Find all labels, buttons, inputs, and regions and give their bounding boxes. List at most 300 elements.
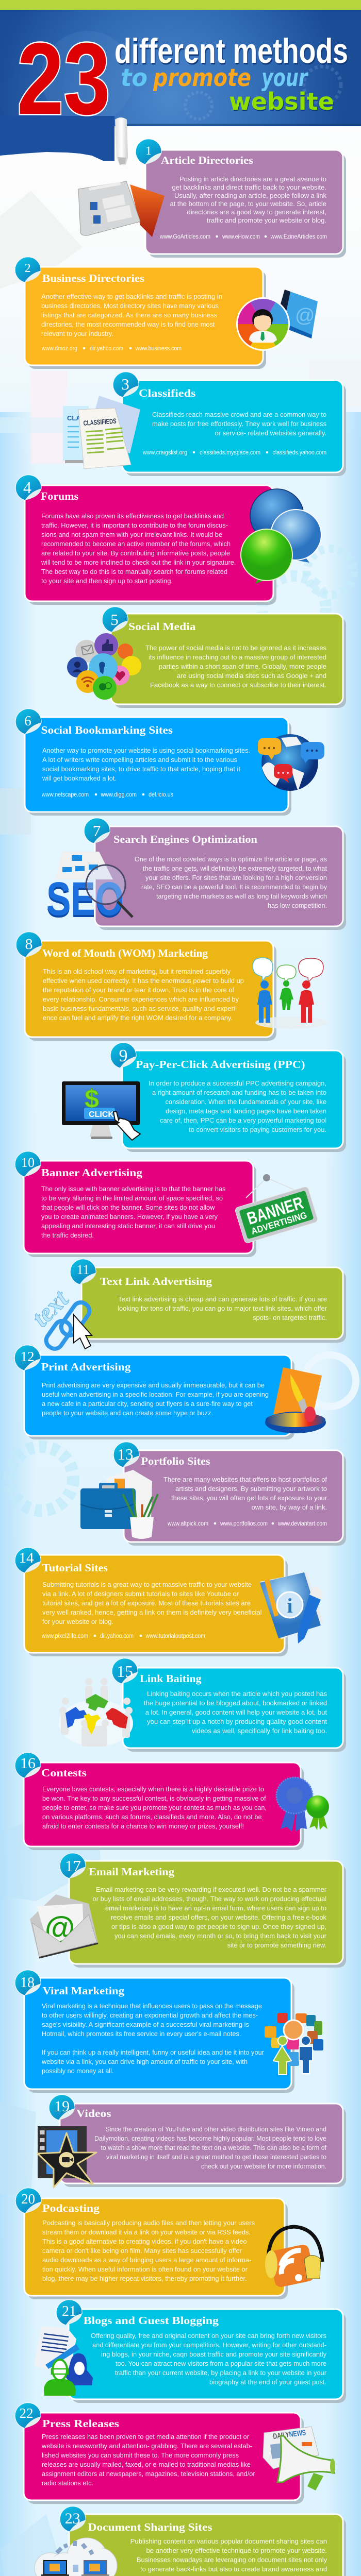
body text: The only issue with banner advertising is to that the banner has xyxy=(41,1185,226,1193)
heading: Social Media xyxy=(128,620,196,633)
number badge 17: 17 xyxy=(65,1857,81,1875)
body text: that people will click on the banner. Some sites do not allow xyxy=(41,1204,215,1211)
body text xyxy=(149,1079,326,1133)
body text xyxy=(130,2537,327,2576)
body text xyxy=(91,2332,327,2386)
body text: a lot. In general, good content will help your website a lot, but xyxy=(145,1708,327,1716)
panel: Link Baiting xyxy=(59,1658,346,1752)
heading: Word of Mouth (WOM) Marketing xyxy=(42,947,208,959)
example links xyxy=(167,1521,327,1527)
body text: assignment editors at newspapers, magazines, television stations, and/or xyxy=(42,2470,255,2478)
body text xyxy=(94,2125,326,2170)
panel: Banner Advertising xyxy=(15,1151,318,1257)
icon: SEO magnifier: SEO xyxy=(46,873,124,925)
body text: artists and designers. By submitting your artwork to xyxy=(175,1485,327,1493)
icon: people and app tiles xyxy=(265,2013,323,2075)
icon: document and bloggers xyxy=(34,2326,93,2396)
heading: Email Marketing xyxy=(89,1866,175,1878)
example links: www.netscape.com xyxy=(41,792,89,798)
heading: Videos xyxy=(76,2107,111,2120)
title line: to promote your: your xyxy=(261,64,308,92)
panel: Tutorial Sites xyxy=(15,1548,323,1656)
icon: RSS with headphones xyxy=(265,2227,322,2288)
heading: Business Directories xyxy=(42,272,144,284)
body text: these sites, you will often get lots of exposure to your xyxy=(171,1494,327,1502)
body text: are using social media sites such as Google + and xyxy=(177,672,326,680)
number badge 14: 14 xyxy=(19,1550,34,1566)
body text: This is a good alternative to creating videos, if you don't have a video xyxy=(42,2238,247,2245)
panel: Social Media xyxy=(67,607,346,708)
body text: Since the creation of YouTube and other video distribution sites like Vimeo and xyxy=(105,2125,326,2133)
body text: stream them or download it via a link on your website or via RSS feeds. xyxy=(42,2228,251,2236)
body text: ing blogs, in your niche, caqn boast traffic and promote your site significantly xyxy=(101,2350,326,2358)
icon: globe with chat bubbles xyxy=(258,734,324,791)
body text: possibly no money at all. xyxy=(42,2067,113,2075)
number badge 5 xyxy=(102,607,128,632)
number badge 10: 10 xyxy=(21,1155,35,1170)
panel: Contests xyxy=(15,1753,329,1850)
body text: the reputation of your brand or tear it down. Trust is in the core of xyxy=(43,986,234,994)
body text: Email marketing can be very rewarding if executed well. Do not be a spammer xyxy=(96,1886,327,1893)
example links: www.portfolios.com xyxy=(220,1521,268,1527)
body text xyxy=(144,1690,327,1735)
body text: Everyone loves contests, especially when there is a highly desirable prize to xyxy=(42,1785,264,1793)
heading: Portfolio Sites xyxy=(141,1455,210,1467)
body text: to generate back-links but also to create brand awareness and xyxy=(140,2565,327,2573)
panel: Podcasting xyxy=(15,2188,322,2299)
icon: speech bubbles xyxy=(241,489,321,584)
number badge 20: 20 xyxy=(21,2191,35,2207)
icon: paint brush and palette xyxy=(265,1367,326,1433)
body text: you to create animated banners. However, if you have a very xyxy=(41,1213,218,1221)
heading: Press Releases xyxy=(42,2417,119,2430)
number badge 19 xyxy=(49,2095,75,2120)
icon: classified papers: CLASSIFIEDS xyxy=(83,417,117,427)
body text: appealing and interesting static banner, it can still drive you xyxy=(41,1222,215,1230)
body text: Hotmail, which promotes its free service in every user's e-mail notes. xyxy=(42,2030,241,2038)
icon: newspaper and megaphone xyxy=(263,2427,335,2490)
number badge 21: 21 xyxy=(62,2303,76,2319)
body text: relevant to your industry. xyxy=(41,330,113,337)
body text: check out your website for more information. xyxy=(201,2162,326,2170)
body text: you can send emails, every month or so, to bring them back to visit your xyxy=(114,1932,327,1940)
body text: receive emails and special offers, on your website. Offering a free e-book xyxy=(111,1913,326,1921)
icon: newspaper and megaphone: DAILYNEWS xyxy=(272,2428,306,2441)
number badge 21 xyxy=(56,2300,82,2325)
panel: Document Sharing Sites xyxy=(35,2506,346,2576)
example links: dir.yahoo.com xyxy=(90,346,123,352)
number badge 16: 16 xyxy=(20,1755,36,1772)
body text xyxy=(163,1476,327,1511)
example links: www.GoArticles.com xyxy=(159,234,210,240)
title line: to promote your xyxy=(121,64,308,92)
body text: Linking baiting occurs when the article which you posted has xyxy=(147,1690,327,1698)
icon: info book and pencil: i xyxy=(287,1594,293,1617)
body text: A lot of writers write compelling articles and submit it to the various xyxy=(42,756,237,764)
body text: the traffic one gets, will definitely be extremely targeted, to what xyxy=(143,865,327,872)
body text: Classifieds reach massive crowd and are a common way to xyxy=(152,411,326,418)
body text: be won. The key to any successful contest, is obviously in getting massive of xyxy=(42,1794,266,1802)
body text: directories are a good way to generate interest, xyxy=(187,208,326,216)
number badge 3 xyxy=(113,372,139,397)
body text: people to enter, so make sure you promote your contest as much as you can, xyxy=(42,1804,267,1811)
body text: to your site and then sign up to start posting. xyxy=(41,577,173,585)
body text: you can step it up a notch by producing quality good content xyxy=(147,1718,327,1725)
header banner xyxy=(0,0,361,166)
example links xyxy=(41,792,173,798)
body text: Submitting tutorials is a great way to get massive traffic to your website xyxy=(42,1581,252,1588)
panel: Social Bookmarking Sites xyxy=(15,709,324,816)
example links: classifieds.myspace.com xyxy=(200,450,260,456)
icon: envelope with at sign xyxy=(30,1894,98,1958)
number badge 13: 13 xyxy=(118,1445,133,1463)
number badge 18 xyxy=(15,1970,41,1995)
body text xyxy=(43,968,244,1022)
body text xyxy=(42,1381,269,1417)
number badge 19: 19 xyxy=(54,2098,70,2115)
number badge 1 xyxy=(136,139,161,164)
body text: spots- on targeted traffic. xyxy=(253,1314,327,1321)
body text xyxy=(42,1581,262,1625)
number badge 23: 23 xyxy=(65,2510,80,2527)
icon: people with puzzle pieces xyxy=(59,1678,133,1747)
icon: directory book and people wheel: @ xyxy=(295,305,315,327)
body text: sions and not spam them with your irrelevant links. It would be xyxy=(41,531,222,538)
body text: Dailymotion, creating videos has become highly popular. Most people tend to love xyxy=(94,2134,326,2142)
body text: via a link. A lot of designers submit tutorials to sites like Youtube or xyxy=(42,1590,239,1598)
body text: audio downloads as a way of bringing users a large amount of informa- xyxy=(42,2256,252,2264)
number badge 4 xyxy=(15,475,41,500)
body text: camera or don't like being on film. Many sites has successfully offer xyxy=(42,2247,242,2255)
panel: Videos xyxy=(38,2095,346,2188)
panel: Press Releases xyxy=(15,2403,335,2504)
body text: for your website or blog. xyxy=(42,1618,113,1625)
panel: Email Marketing xyxy=(30,1853,346,1968)
body text: or buy lists of email addresses, though. The way to work on producing effectual xyxy=(93,1895,326,1903)
body text: will get bookmarked a lot. xyxy=(42,774,117,782)
number badge 2: 2 xyxy=(25,262,31,275)
body text xyxy=(42,1785,267,1830)
body text xyxy=(41,512,236,585)
example links: www.dmoz.org xyxy=(41,346,77,352)
body text: to watch a show more that read the text on a website. This can also be a form of xyxy=(101,2144,326,2151)
example links xyxy=(41,346,182,352)
number badge 7: 7 xyxy=(93,822,101,840)
number badge 6 xyxy=(15,709,41,734)
body text: traffic than your current website, by placing a link to your website in your xyxy=(115,2369,327,2377)
example links xyxy=(159,234,327,240)
example links: del.icio.us xyxy=(149,792,173,798)
title number 23: 23 xyxy=(17,22,110,135)
heading: Print Advertising xyxy=(41,1361,131,1373)
example links xyxy=(41,1633,205,1639)
body text: Usually, after reading an article, people follow a link xyxy=(174,192,326,199)
body text xyxy=(41,1185,226,1239)
heading: Forums xyxy=(41,490,78,502)
body text: videos as well, specifically for link baiting too. xyxy=(192,1727,327,1735)
heading: Text Link Advertising xyxy=(100,1275,212,1287)
example links: www.eHow.com xyxy=(222,234,260,240)
heading: Banner Advertising xyxy=(41,1166,143,1179)
title line: to promote your: to xyxy=(121,64,147,92)
heading: Article Directories xyxy=(161,154,253,166)
body text: rate, SEO can be a powerful tool. It is recommended to begin by xyxy=(141,883,327,891)
icon: social media clouds xyxy=(67,633,141,700)
example links: www.altpick.com xyxy=(167,1521,208,1527)
body text xyxy=(41,2002,265,2075)
panel: Portfolio Sites xyxy=(80,1442,346,1546)
body text: too. You can attract new visitors from a popular site that gets much more xyxy=(116,2360,326,2367)
body text: viral marketing in itself and is a great method to get those interested parties to xyxy=(106,2153,326,2161)
body text: Posting in article directories are a great avenue to xyxy=(179,175,326,183)
body text xyxy=(93,1886,327,1949)
body text: website is newsworthy and attention- grabbing. There are several estab- xyxy=(41,2442,252,2450)
icon: hanging banner sign xyxy=(235,1174,318,1244)
panel: Word of Mouth xyxy=(16,932,327,1041)
icon: briefcase and brushes xyxy=(80,1470,158,1539)
body text: parties within a short span of time. Globally, more people xyxy=(159,663,326,670)
heading: Document Sharing Sites xyxy=(88,2521,212,2533)
panel: Pay-Per-Click Advertising xyxy=(62,1043,346,1152)
icon: classified papers xyxy=(63,396,140,469)
body text: Press releases has been proven to get media attention if the product or xyxy=(42,2433,250,2441)
body text: Forums have also proven its effectiveness to get backlinks and xyxy=(41,512,224,520)
body text: Businesses nowadays are leveraging on document sites not only xyxy=(137,2556,327,2564)
body text: the traffic desired. xyxy=(41,1231,94,1239)
number badge 1: 1 xyxy=(145,144,152,157)
panel: Print Advertising xyxy=(14,1345,326,1439)
body text: This is an old school way of marketing, but it remained superbly xyxy=(43,968,231,975)
number badge 15 xyxy=(112,1658,138,1684)
number badge 17 xyxy=(60,1853,86,1878)
example links: www.EzineArticles.com xyxy=(270,234,327,240)
body text: to convert visitors to paying customers for you. xyxy=(189,1126,326,1133)
body text: business directories. Most directory sites have many various xyxy=(41,302,219,310)
body text: design, meta tags and landing pages have been taken xyxy=(166,1107,326,1115)
body text: Another way to promote your website is using social bookmarking sites. xyxy=(42,747,250,754)
body text: looking for tons of traffic, you can go to major text link sites, which offer xyxy=(118,1304,327,1312)
panel: Article Directories xyxy=(78,139,346,258)
panel: Blogs and Guest Blogging xyxy=(34,2300,346,2403)
body text: listings that are categorized. As there are so many business xyxy=(41,311,217,319)
example links xyxy=(142,450,326,456)
body text: tutorial sites, and get a lot of exposure. Most of these tutorials sites are xyxy=(42,1599,251,1607)
body text: Another effective way to get backlinks and traffic is posting in xyxy=(41,293,222,300)
body text: a right amount of research and funding has to be taken into xyxy=(152,1089,326,1096)
body text: Offering quality, free and original content on your site can bring forth new visitors xyxy=(91,2332,326,2340)
example links: www.tutorialoutpost.com xyxy=(145,1633,205,1639)
body text: or service- related websites generally. xyxy=(215,429,326,437)
body text: make posts for free effortlessly. They work well for business xyxy=(152,420,326,428)
body text: In order to produce a successful PPC advertising campaign, xyxy=(149,1079,326,1087)
title line: to promote your: promote xyxy=(153,64,251,92)
body text: be another very effective technique to promote your website. xyxy=(146,2547,327,2554)
number badge 7 xyxy=(84,818,110,843)
number badge 9 xyxy=(110,1043,136,1068)
body text: email marketing is to have an opt-in email form, where users can sign up to xyxy=(105,1904,326,1912)
heading: Contests xyxy=(41,1767,87,1779)
body text: Facebook as a way to connect or subscribe to their interest. xyxy=(150,681,326,689)
icon: clouds and laptops xyxy=(35,2538,117,2576)
body text: There are many websites that offers to host portfolios of xyxy=(163,1476,327,1483)
body text: social bookmarking sites, to drive traffic to that article, hoping that it xyxy=(42,765,240,773)
body text xyxy=(42,2219,255,2282)
body text: own site, by way of a link. xyxy=(252,1503,327,1511)
example links: www.deviantart.com xyxy=(277,1521,327,1527)
body text: Print advertising are very expensive and usually immeasurable, but it can be xyxy=(42,1381,265,1389)
example links: dir.yahoo.com xyxy=(100,1633,134,1639)
icon: award ribbons xyxy=(276,1777,329,1832)
icon: envelope with at sign: @ xyxy=(45,1910,75,1945)
heading: Search Engines Optimization xyxy=(113,833,257,845)
number badge 12 xyxy=(14,1345,40,1370)
number badge 6: 6 xyxy=(24,713,31,728)
heading: Social Bookmarking Sites xyxy=(41,724,173,736)
number badge 20 xyxy=(15,2188,41,2213)
body text: blog, there may be higher repeat visitors, thereby promoting it further. xyxy=(42,2275,247,2282)
icon: film strip and star xyxy=(38,2126,96,2188)
body text: Podcasting is basically producing audio files and then letting your users xyxy=(42,2219,255,2227)
body text: very well ranked, hence, getting a link on them is definitely very beneficial xyxy=(42,1608,262,1616)
body text: or tips is also a good way to get people to sign up. Once they signed up, xyxy=(111,1923,326,1930)
icon: info book and pencil xyxy=(260,1572,323,1643)
body text: recommended to become an active member of the forums, which xyxy=(41,540,231,548)
body text xyxy=(145,644,326,689)
body text: the huge potential to be blogged about, bookmarked or linked xyxy=(144,1699,327,1707)
icon: SEO magnifier xyxy=(46,852,133,925)
body text: on various platforms, such as forums, classifieds and more. Also, do not be xyxy=(42,1813,262,1821)
body text: tion quickly. When useful information is often found on your website or xyxy=(42,2265,248,2273)
body text: biography at the end of your guest post. xyxy=(209,2378,326,2386)
icon: classified papers: CLAS xyxy=(67,414,86,422)
number badge 12: 12 xyxy=(21,1349,34,1364)
icon: monitor with click button xyxy=(62,1081,140,1140)
body text: care of, then, PPC can be a very powerful marketing tool xyxy=(160,1116,326,1124)
body text xyxy=(118,1295,327,1321)
panel: Viral Marketing xyxy=(15,1970,323,2093)
icon: monitor with click button: $ xyxy=(85,1084,99,1113)
number badge 22 xyxy=(15,2403,41,2428)
body text: get backlinks and direct traffic back to your website. xyxy=(172,183,326,191)
icon: three people talking xyxy=(253,958,327,1029)
heading: Blogs and Guest Blogging xyxy=(84,2314,219,2327)
number badge 5: 5 xyxy=(110,611,119,629)
body text: every relationship. Consumer experiences which are influenced by xyxy=(43,995,239,1003)
example links: www.craigslist.org xyxy=(142,450,187,456)
icon: paper curl xyxy=(115,117,128,166)
body text: Text link advertising is cheap and can generate lots of traffic. If you are xyxy=(118,1295,327,1303)
body text: The power of social media is not to be ignored as it increases xyxy=(145,644,326,652)
panel: Search Engines Optimization xyxy=(46,818,346,930)
panel: Forums xyxy=(15,475,321,605)
body text: will tend to be more inclined to check out the link in your signature. xyxy=(41,558,236,566)
body text: lished websites you can submit these to. The more commonly press xyxy=(42,2451,239,2459)
example links: www.pixel2life.com xyxy=(41,1633,88,1639)
body text: basic business fundamentals, such as service, quality and experi- xyxy=(43,1005,237,1012)
number badge 4: 4 xyxy=(23,478,31,497)
body text: If you can think up a really intelligent, funny or useful idea and tie it into your xyxy=(42,2048,265,2056)
icon: hanging banner sign: ADVERTISING xyxy=(250,1210,308,1236)
icon: monitor with click button: CLICK xyxy=(89,1110,114,1119)
icon: text link chain and cursor xyxy=(26,1284,92,1352)
number badge 23 xyxy=(60,2506,86,2532)
panel: Text Link Advertising xyxy=(26,1259,346,1352)
body text: Publishing content on various popular document sharing sites can xyxy=(130,2537,327,2545)
body text: traffic. However, it is important to contribute to the forum discus- xyxy=(41,521,228,529)
heading: Viral Marketing xyxy=(43,1985,125,1997)
body text xyxy=(135,855,327,909)
body text: One of the most coveted ways is to optimize the article or page, as xyxy=(135,855,327,863)
heading: Podcasting xyxy=(42,2202,100,2214)
icon: directory book and people wheel xyxy=(236,290,318,351)
body text: and differentiate you from your competitiors. However, writing for other outstand- xyxy=(92,2341,326,2349)
number badge 16 xyxy=(15,1753,41,1778)
body text xyxy=(152,411,326,437)
body text: sage's visibility. A significant example of a successful viral marketing is xyxy=(42,2021,249,2028)
number badge 11: 11 xyxy=(76,1262,90,1277)
body text: useful when advertising in a specific location. For example, if you are opening xyxy=(42,1391,269,1398)
body text: website via a link, you can drive high amount of traffic to your site, with xyxy=(41,2058,248,2065)
heading: Classifieds xyxy=(139,387,196,399)
body text: afraid to enter contests for a chance to win money or prizes, yourself! xyxy=(42,1822,244,1830)
number badge 13 xyxy=(113,1442,139,1467)
number badge 9: 9 xyxy=(119,1046,128,1065)
body text: a new cafe in a particular city, sending out flyers is a sure-fire way to get xyxy=(42,1400,253,1408)
body text: its influence in reaching out to a massive group of interested xyxy=(149,653,326,661)
body text: to be very alluring in the limited amount of space specified, so xyxy=(41,1194,223,1202)
heading: Pay-Per-Click Advertising (PPC) xyxy=(136,1058,305,1071)
body text xyxy=(42,747,250,782)
body text xyxy=(41,293,222,337)
body text: at the bottom of the page, to your website. So, article xyxy=(170,200,326,208)
panel: Classifieds xyxy=(63,372,346,476)
example links: classifieds.yahoo.com xyxy=(272,450,326,456)
icon: text link chain and cursor: text xyxy=(26,1284,74,1332)
number badge 15: 15 xyxy=(117,1662,133,1681)
body text: consideration. When the fundamentals of your site, like xyxy=(165,1098,326,1106)
number badge 18: 18 xyxy=(20,1975,35,1991)
body text: traffic and promote your website or blog. xyxy=(207,216,326,224)
number badge 2 xyxy=(15,257,41,282)
number badge 10 xyxy=(15,1151,41,1177)
body text: has low competition. xyxy=(268,902,327,909)
number badge 11 xyxy=(70,1259,96,1284)
number badge 3: 3 xyxy=(121,375,129,393)
body text: radio stations etc. xyxy=(42,2479,93,2487)
body text: Viral marketing is a technique that influences users to pass on the message xyxy=(42,2002,262,2010)
body text: to other users willingly, creating an exponential growth and affect the mes- xyxy=(42,2011,258,2019)
body text: your site offers. For sites that are looking for a high conversion xyxy=(145,874,327,882)
title line: website: website xyxy=(229,88,334,115)
body text: directories, the most recommended way is to find one most xyxy=(41,320,215,328)
heading: Link Baiting xyxy=(140,1672,202,1685)
example links: www.digg.com xyxy=(101,792,137,798)
body text: are related to your site. By contributing informative posts, people xyxy=(41,549,230,557)
panel: Business Directories xyxy=(15,257,318,369)
body text: The best way to do this is to manually search for forums related xyxy=(41,568,227,575)
number badge 8: 8 xyxy=(25,936,33,953)
number badge 8 xyxy=(16,932,42,957)
body text: effective when used correctly. It has the enormous power to build up xyxy=(43,977,244,985)
heading: Tutorial Sites xyxy=(42,1562,108,1574)
body text: releases are usually mailed, faxed, or e-mailed to traditional medias like xyxy=(42,2461,251,2468)
body text: ence can fuel and amplify the right WOM desired for a company. xyxy=(43,1014,233,1022)
body text xyxy=(170,175,326,224)
number badge 22: 22 xyxy=(20,2405,33,2421)
body text xyxy=(41,2433,255,2487)
body text: targeting niche markets as well as long tail keywords which xyxy=(156,892,327,900)
body text: people to your website and can create some hype or buzz. xyxy=(42,1409,213,1417)
